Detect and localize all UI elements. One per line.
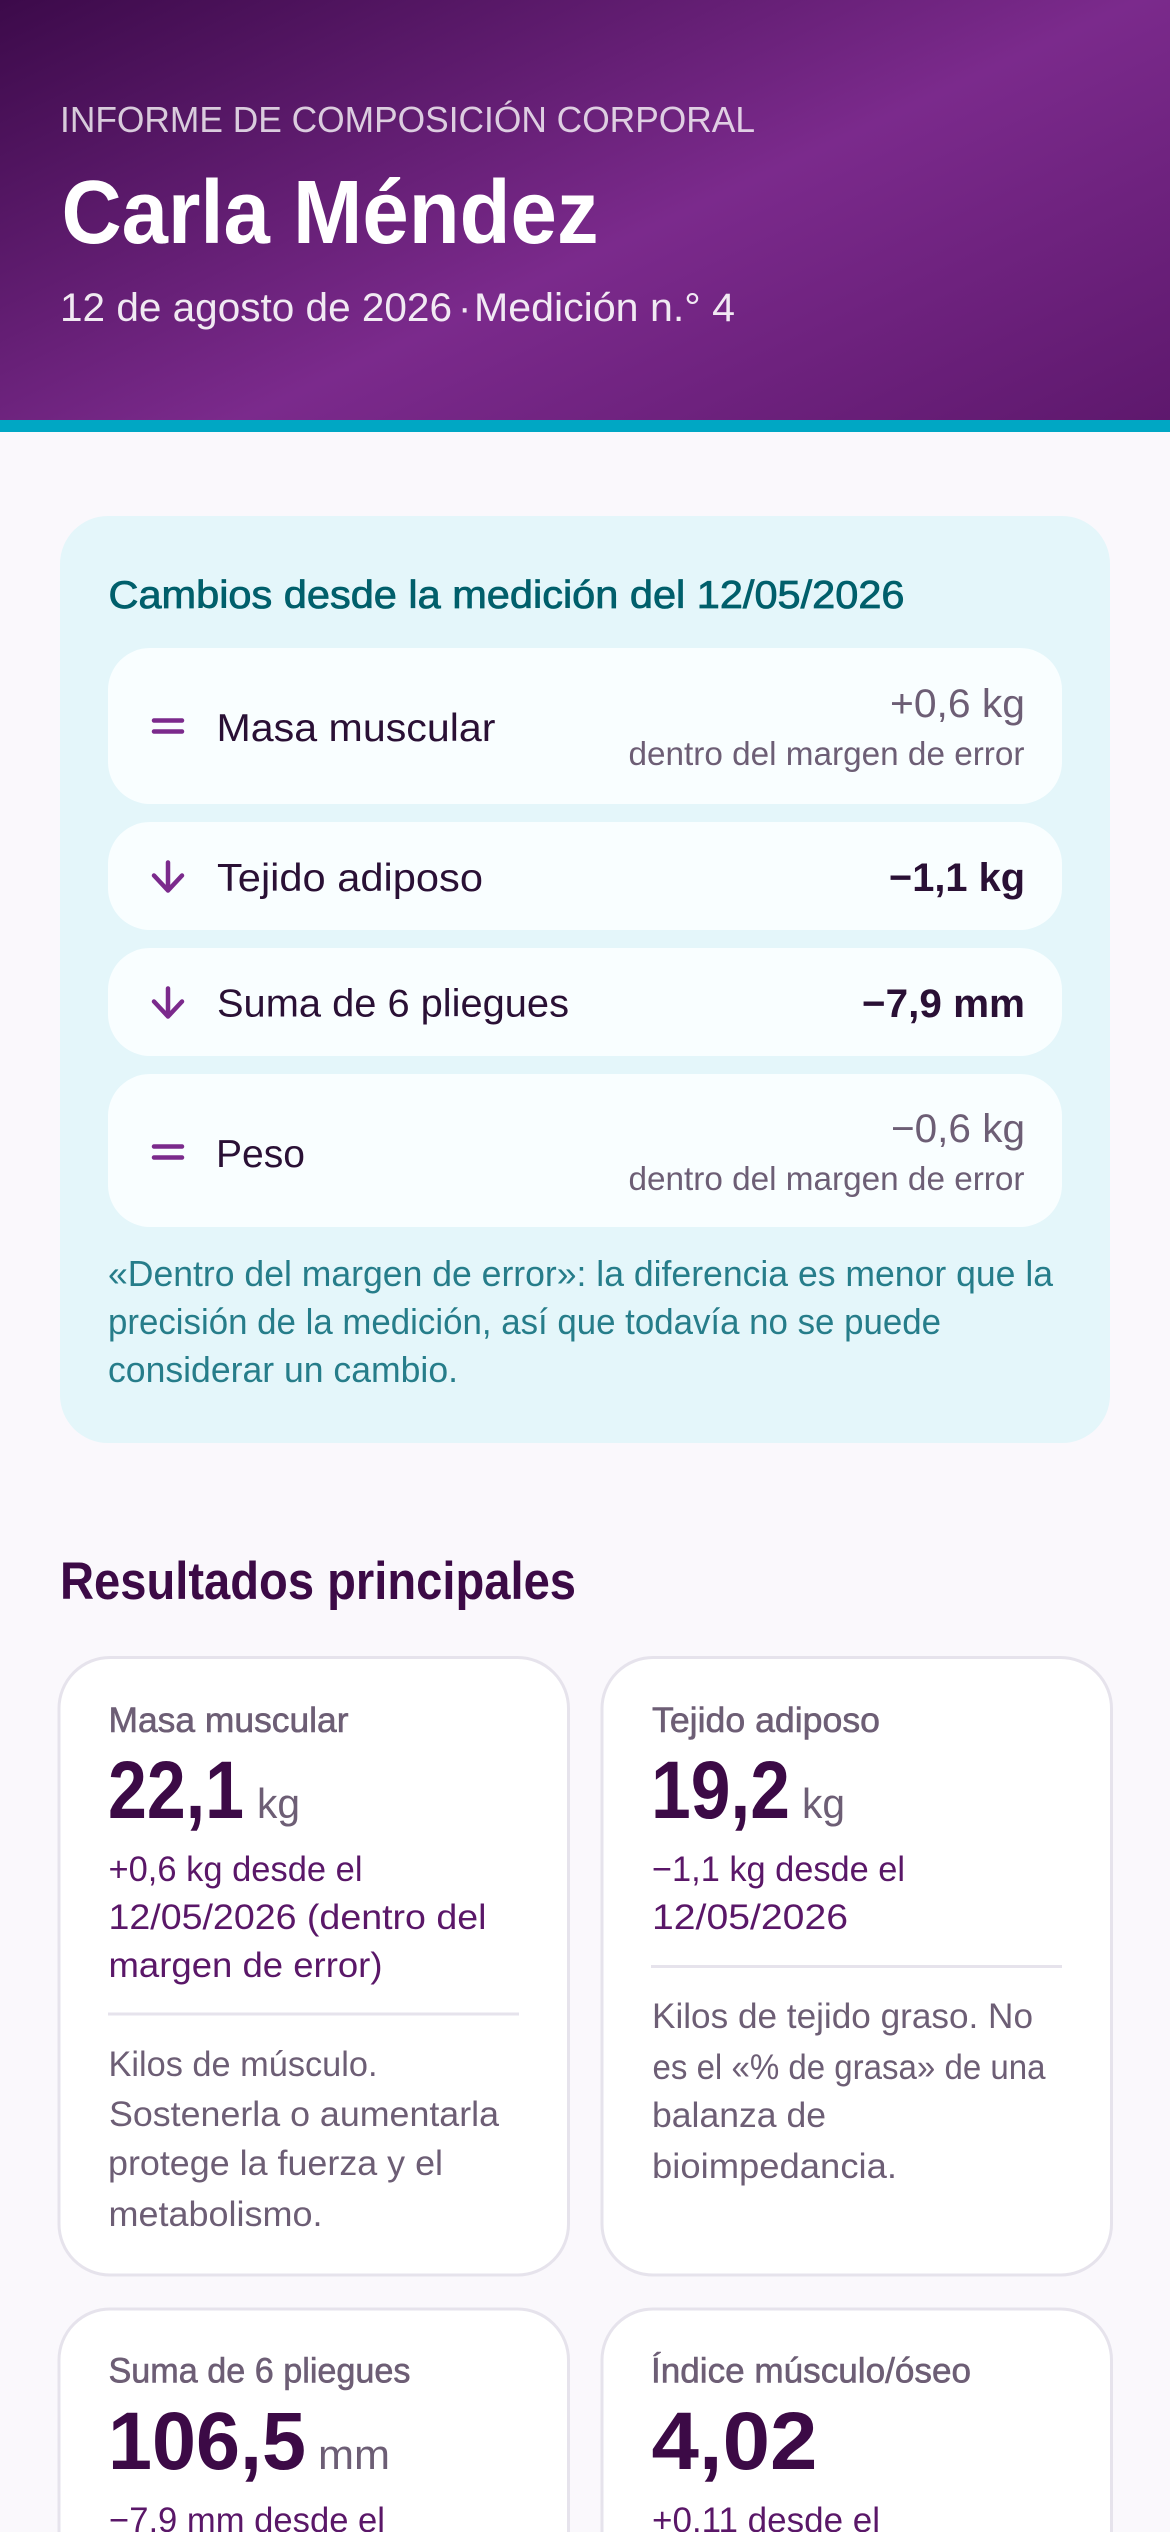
metric change <box>652 1850 905 1937</box>
row value: +0,6 kg <box>890 682 1025 726</box>
panel heading: Cambios desde la medición del 12/05/2026 <box>108 574 904 617</box>
row note: dentro del margen de error <box>628 1160 1024 1197</box>
card: suma de 6 pliegues <box>59 2309 568 2532</box>
metric description: Kilos de músculo. <box>108 2045 378 2084</box>
metric description <box>108 2045 500 2234</box>
row: tejido adiposo <box>108 822 1062 930</box>
icon: down arrow <box>154 988 182 1016</box>
metric description: bioimpedancia. <box>652 2147 897 2186</box>
card: tejido adiposo <box>602 1658 1112 2275</box>
metric change: margen de error) <box>108 1946 382 1985</box>
metric description: Sostenerla o aumentarla <box>109 2095 500 2134</box>
header date and measurement: · <box>458 286 471 330</box>
metric description: protege la fuerza y el <box>108 2144 443 2183</box>
title: patient name: Carla Méndez <box>62 163 598 263</box>
metric value: 22,1 <box>108 1745 244 1836</box>
metric description: balanza de <box>652 2096 826 2135</box>
row: masa muscular <box>108 648 1062 804</box>
metric unit: kg <box>257 1780 300 1827</box>
metric description: Kilos de tejido graso. No <box>652 1997 1033 2036</box>
row label: Peso <box>216 1133 305 1176</box>
header date and measurement: 12 de agosto de 2026 <box>60 286 452 330</box>
metric value: 106,5 <box>108 2396 306 2487</box>
row label: Masa muscular <box>216 707 496 750</box>
metric unit: kg <box>802 1780 845 1827</box>
heading: main results: Resultados principales <box>60 1552 576 1611</box>
header date and measurement: Medición n.° 4 <box>474 286 735 330</box>
row value: −1,1 kg <box>889 856 1025 900</box>
metric unit: mm <box>318 2431 390 2478</box>
row: peso <box>108 1074 1062 1227</box>
metric change: +0,6 kg desde el <box>108 1850 362 1889</box>
panel: changes since last measurement <box>60 516 1110 1443</box>
metric change <box>108 1850 486 1985</box>
metric label: Suma de 6 pliegues <box>108 2352 410 2390</box>
icon: equal <box>154 1146 182 1158</box>
row: suma de 6 pliegues <box>108 948 1062 1056</box>
explanatory note: considerar un cambio. <box>108 1349 458 1390</box>
explanatory note <box>108 1253 1054 1390</box>
explanatory note: precisión de la medición, así que todavía no se puede <box>108 1301 941 1342</box>
row note: dentro del margen de error <box>628 735 1024 772</box>
header date and measurement <box>60 286 735 330</box>
metric label: Masa muscular <box>108 1701 349 1740</box>
metric label: Tejido adiposo <box>652 1701 880 1740</box>
card: masa muscular <box>59 1658 568 2275</box>
row label: Suma de 6 pliegues <box>217 982 569 1026</box>
metric value: 4,02 <box>652 2396 818 2487</box>
metric change: −1,1 kg desde el <box>652 1850 905 1889</box>
row value: −7,9 mm <box>862 982 1025 1026</box>
metric description: es el «% de grasa» de una <box>652 2048 1046 2087</box>
row value: −0,6 kg <box>891 1107 1025 1151</box>
metric description: metabolismo. <box>108 2195 322 2234</box>
card: índice músculo/óseo <box>602 2309 1112 2532</box>
explanatory note: «Dentro del margen de error»: la diferencia es menor que la <box>108 1253 1054 1294</box>
row label: Tejido adiposo <box>217 857 483 900</box>
metric label: Índice músculo/óseo <box>651 2352 971 2390</box>
panel: header <box>0 0 1170 432</box>
icon: equal <box>154 720 182 732</box>
icon: down arrow <box>154 862 182 890</box>
metric change: 12/05/2026 <box>652 1898 848 1937</box>
metric value: 19,2 <box>651 1745 790 1836</box>
metric change: 12/05/2026 (dentro del <box>108 1898 486 1937</box>
metric description <box>652 1997 1046 2186</box>
header eyebrow: INFORME DE COMPOSICIÓN CORPORAL <box>60 99 755 140</box>
